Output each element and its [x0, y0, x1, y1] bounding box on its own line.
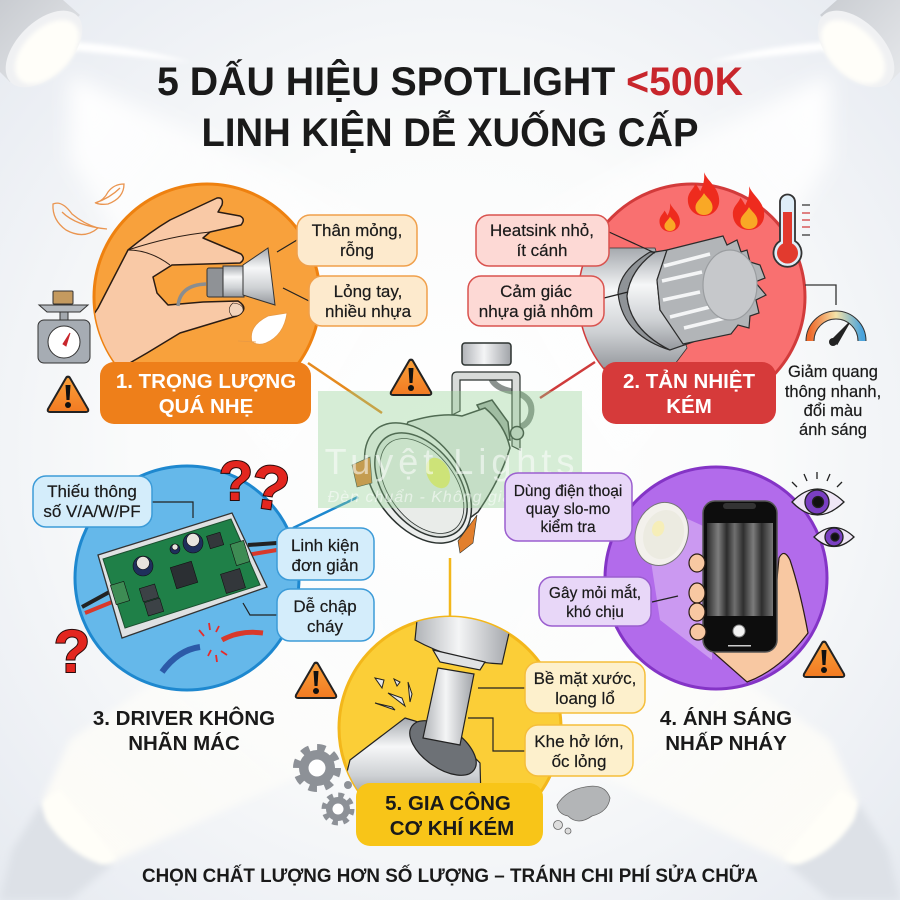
label text: 1. TRỌNG LƯỢNG	[116, 370, 296, 393]
gear tiny	[344, 781, 352, 789]
line	[277, 240, 297, 252]
heading	[93, 706, 275, 755]
label text: 2. TẢN NHIỆT	[623, 369, 756, 393]
shutter	[733, 625, 745, 637]
callout: cảm giác	[468, 276, 604, 326]
driver wires	[82, 543, 277, 607]
spotlight: top left corner	[0, 0, 96, 101]
driver wires red	[85, 550, 277, 613]
feather icon	[53, 203, 107, 235]
watermark	[318, 391, 582, 508]
mount cap	[462, 343, 511, 365]
inductor	[144, 598, 164, 616]
capacitor small	[170, 544, 180, 554]
panel 1: trọng lượng quá nhẹ	[38, 184, 427, 424]
lamp body	[575, 248, 687, 368]
callout: lỏng tay: nhiều nhựa	[325, 302, 412, 321]
driver enclosure	[98, 513, 267, 638]
callout: thiếu thông số: số V/A/W/PF	[43, 502, 141, 521]
white feather	[238, 313, 287, 344]
callout: khe hở	[525, 725, 633, 776]
note text: ánh sáng	[799, 421, 867, 439]
callout: dùng điện thoại: Dùng điện thoại	[514, 483, 622, 500]
fingers	[689, 554, 706, 640]
label text	[623, 369, 756, 418]
callout: thân mỏng: rỗng	[340, 241, 374, 260]
callout: khe hở: ốc lỏng	[552, 752, 606, 771]
callout: dùng điện thoại: kiểm tra	[540, 519, 596, 536]
watermark: Tuyệt Lights	[325, 441, 579, 482]
reflector	[356, 416, 486, 554]
callout: bề mặt: loang lổ	[555, 689, 615, 708]
wire loop	[490, 372, 531, 428]
fins star	[657, 236, 766, 344]
panel 5: gia công cơ khí kém	[296, 610, 645, 846]
orange tab left	[352, 457, 372, 487]
gear small	[324, 796, 352, 822]
capacitor	[183, 533, 203, 553]
viewfinder	[707, 523, 773, 616]
phone	[703, 501, 777, 652]
callout: thiếu thông số: Thiếu thông	[47, 482, 137, 501]
title: LINH KIỆN DỄ XUỐNG CẤP	[202, 109, 698, 155]
bracket	[452, 372, 520, 450]
top cylinder	[414, 617, 510, 665]
circle	[75, 466, 299, 690]
connector: red	[540, 362, 595, 398]
warning: center	[391, 360, 431, 395]
hand	[90, 198, 244, 364]
IC	[170, 561, 198, 589]
heatsink	[618, 236, 766, 350]
question marks	[54, 449, 294, 685]
light beam	[650, 510, 712, 660]
heading: 4. ÁNH SÁNG	[660, 707, 792, 730]
callout: gây mỏi mắt: khó chịu	[566, 604, 624, 621]
end disc	[703, 250, 757, 320]
footer: CHỌN CHẤT LƯỢNG HƠN SỐ LƯỢNG – TRÁNH CHI PHÍ SỬA CHỮA	[142, 863, 758, 887]
label text	[116, 370, 296, 418]
hand	[713, 553, 808, 682]
line	[152, 502, 193, 518]
neck	[433, 650, 485, 670]
callout: bề mặt	[525, 662, 645, 713]
flames	[659, 172, 764, 232]
connector line	[805, 285, 836, 305]
heading: NHÃN MÁC	[128, 732, 240, 755]
terminal	[230, 540, 250, 566]
circle	[579, 184, 805, 410]
label text: KÉM	[666, 395, 712, 418]
callout: lỏng tay	[309, 276, 427, 326]
hole	[409, 720, 477, 776]
callout: dễ chập: cháy	[307, 617, 343, 636]
callout: heatsink: Heatsink nhỏ,	[490, 221, 594, 240]
terminal	[110, 581, 130, 605]
title	[157, 58, 743, 155]
screw	[510, 426, 524, 440]
thermometer	[773, 194, 810, 267]
callout: dùng điện thoại: quay slo-mo	[526, 501, 610, 518]
line	[478, 687, 525, 689]
warning	[48, 377, 88, 412]
spotlight: top right corner	[804, 0, 900, 101]
inductor	[139, 584, 159, 602]
connector: blue	[293, 497, 358, 528]
note text: Giảm quang	[788, 363, 878, 381]
callout: heatsink	[476, 215, 609, 266]
label	[602, 362, 776, 424]
rear ring	[618, 252, 670, 350]
base	[347, 717, 482, 790]
callout: thân mỏng: Thân mỏng,	[312, 221, 402, 240]
note text	[785, 363, 881, 439]
callout: dùng điện thoại	[505, 473, 632, 541]
question marks: ?	[247, 452, 294, 525]
callout: lỏng tay: Lỏng tay,	[334, 282, 402, 301]
line	[243, 603, 277, 615]
question marks: ?	[54, 618, 90, 685]
scratch shards	[375, 678, 412, 710]
label text: QUÁ NHẸ	[159, 395, 253, 418]
panel 4: ánh sáng nhấp nháy	[505, 467, 854, 755]
callout: thân mỏng	[297, 215, 417, 266]
line	[604, 292, 628, 298]
orange tab bottom	[458, 515, 477, 553]
wire	[178, 284, 206, 306]
circle	[94, 184, 320, 410]
callout: cảm giác: nhựa giả nhôm	[479, 302, 593, 321]
callout: gây mỏi mắt: Gây mỏi mắt,	[549, 585, 641, 602]
eye	[792, 472, 844, 515]
fixture	[347, 617, 510, 790]
circle	[605, 467, 827, 689]
transistor	[207, 532, 224, 549]
callout: linh kiện: Linh kiện	[291, 536, 359, 555]
heading: NHẤP NHÁY	[665, 732, 787, 755]
callout: cảm giác: Cảm giác	[500, 282, 572, 301]
reflector inner	[363, 423, 481, 549]
question marks: ?	[219, 449, 253, 512]
callout: linh kiện: đơn giản	[292, 556, 358, 575]
pcb	[103, 519, 260, 628]
watermark: Đèn chuẩn - Không gian sáng	[328, 488, 566, 506]
connector: yellow	[449, 558, 451, 618]
title: 5 DẤU HIỆU SPOTLIGHT <500K	[157, 58, 743, 104]
line	[283, 288, 309, 301]
broken wire blue	[162, 647, 200, 672]
callout: heatsink: ít cánh	[516, 241, 568, 260]
lamp cone	[385, 408, 510, 540]
arm	[423, 668, 474, 745]
small lamp	[207, 248, 275, 305]
callout: gây mỏi mắt	[539, 577, 651, 626]
pcb components	[110, 532, 250, 616]
central spotlight	[343, 343, 531, 563]
circle	[339, 617, 561, 839]
label text: 5. GIA CÔNG	[385, 791, 511, 815]
label text: CƠ KHÍ KÉM	[390, 817, 514, 840]
connector: orange	[308, 363, 382, 413]
fin bars	[662, 254, 725, 328]
callout: dễ chập	[277, 589, 374, 641]
warning	[804, 642, 844, 677]
callout: khe hở: Khe hở lớn,	[534, 732, 624, 751]
callout: linh kiện	[277, 528, 374, 580]
callout: bề mặt: Bề mặt xước,	[534, 669, 636, 688]
capacitor	[133, 556, 153, 576]
panel 2: tản nhiệt kém	[468, 172, 881, 439]
warning	[296, 663, 336, 698]
gear large	[297, 748, 337, 788]
spotlight: bottom right corner	[784, 790, 900, 900]
debris	[554, 786, 610, 834]
LED chip	[421, 454, 455, 492]
small lamp	[627, 495, 696, 572]
label text	[385, 791, 514, 840]
notch	[723, 503, 756, 509]
label	[100, 362, 311, 424]
barrel	[627, 250, 693, 350]
panel 3: driver không nhãn mác	[33, 449, 374, 755]
front rim	[343, 403, 493, 563]
note text: thông nhanh,	[785, 383, 881, 401]
scale	[38, 291, 90, 363]
feather icon small	[95, 184, 124, 204]
chip	[221, 569, 245, 593]
home bar	[728, 645, 751, 646]
eye small	[814, 528, 854, 546]
note text: đổi màu	[804, 402, 862, 420]
fins	[477, 400, 510, 440]
heading: 3. DRIVER KHÔNG	[93, 706, 275, 730]
line	[652, 596, 678, 602]
gauge	[810, 315, 862, 346]
label	[356, 783, 543, 846]
sparks	[199, 623, 227, 662]
line	[609, 232, 655, 253]
callout: dễ chập: Dễ chập	[293, 597, 357, 616]
line	[468, 718, 525, 751]
callout: thiếu thông số	[33, 476, 152, 527]
spotlight: bottom left corner	[0, 790, 116, 900]
heading	[660, 707, 792, 755]
broken wire red	[222, 632, 263, 640]
